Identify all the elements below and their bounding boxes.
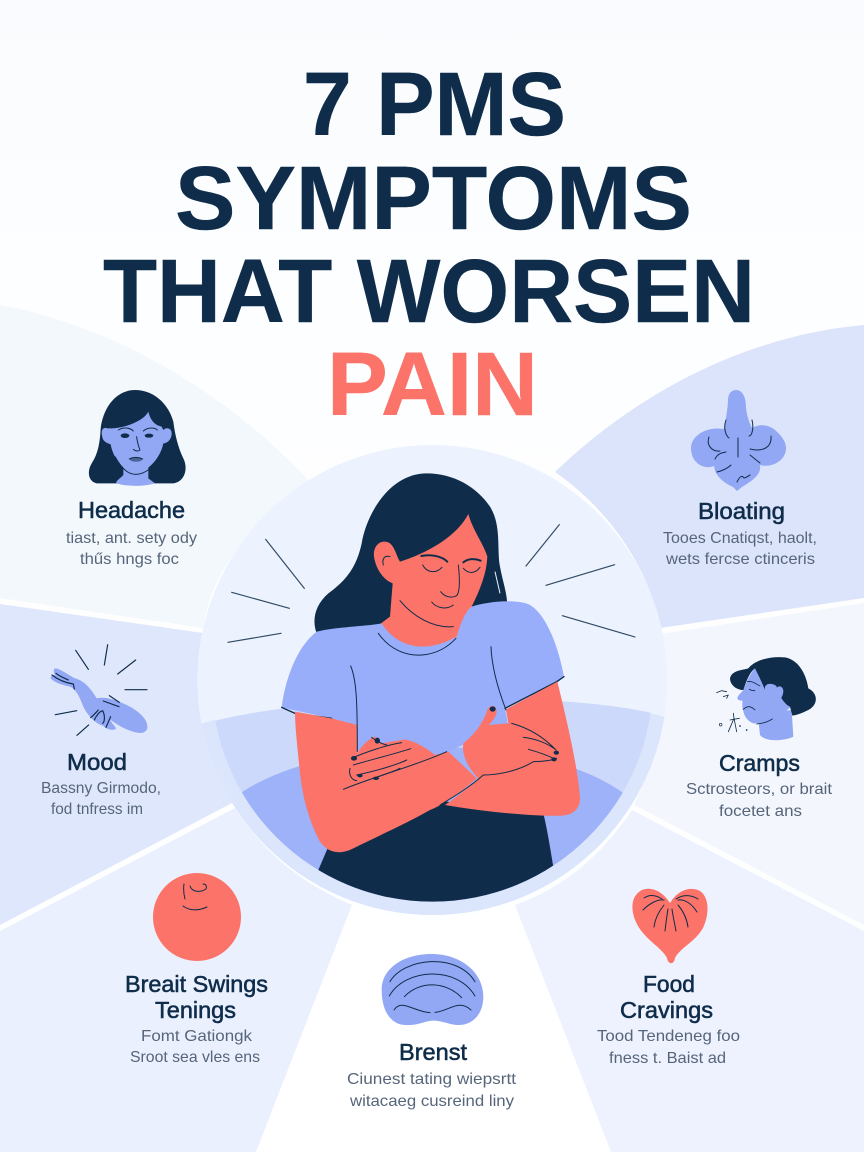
- symptom: cramps: [686, 657, 833, 820]
- panel: breast swings background: [0, 808, 352, 1152]
- description: fness t. Baist ad: [609, 1050, 726, 1067]
- symptom: mood: [41, 645, 161, 818]
- label: Brenst: [399, 1039, 468, 1065]
- right arm and hand: [445, 682, 580, 816]
- label: Food: [643, 971, 695, 997]
- description: [663, 530, 817, 568]
- symptom: food cravings: [597, 889, 740, 1067]
- panel: cramps background: [634, 603, 864, 925]
- hair: [314, 473, 507, 637]
- hair highlight: [495, 572, 500, 593]
- title: SYMPTOMS: [175, 149, 692, 249]
- label: [125, 971, 268, 1023]
- title: PAIN: [327, 335, 538, 435]
- label: Breait Swings: [125, 971, 268, 997]
- left arm: [295, 712, 477, 852]
- nails: [351, 706, 559, 780]
- description: [66, 530, 197, 568]
- icon: heart leaf: [632, 889, 708, 963]
- drawing details: face, arms, fingers: [343, 555, 557, 805]
- symptom: bloating: [663, 390, 817, 568]
- panel: bloating background: [555, 325, 864, 628]
- description: Bassny Girmodo,: [41, 780, 161, 797]
- description: Tooes Cnatiqst, haolt,: [663, 530, 817, 547]
- description: Tood Tendeneg foo: [597, 1028, 740, 1045]
- description: [41, 780, 161, 818]
- skirt: [318, 802, 554, 902]
- label: Mood: [67, 749, 127, 775]
- t-shirt: [282, 601, 564, 755]
- label: Bloating: [698, 498, 785, 524]
- icon: hand with pain lines: [51, 645, 147, 735]
- title: [103, 55, 755, 435]
- title: 7 PMS: [303, 55, 566, 155]
- label: Headache: [78, 497, 185, 523]
- pain rays: [228, 525, 635, 642]
- neck and face: [374, 514, 487, 650]
- description: witacaeg cusreind liny: [349, 1093, 514, 1110]
- symptom: breast: [347, 954, 517, 1110]
- description: wets fercse ctinceris: [665, 551, 815, 568]
- symptom: headache: [66, 390, 197, 568]
- icon: profile head: [717, 657, 816, 740]
- description: Fomt Gationgk: [141, 1028, 253, 1045]
- panel: breast background: [256, 905, 611, 1152]
- description: focetet ans: [719, 803, 802, 820]
- icon: red ball: [153, 873, 241, 961]
- panel: headache background: [0, 305, 310, 628]
- panel: mood background: [0, 604, 232, 925]
- sleeve hems: [282, 677, 564, 718]
- label: Tenings: [155, 997, 236, 1023]
- title: THAT WORSEN: [103, 242, 755, 342]
- panel: food cravings background: [515, 810, 864, 1152]
- label: [620, 971, 713, 1023]
- description: fod tnfress im: [51, 801, 143, 818]
- icon: head with headache: [89, 390, 186, 486]
- icon: bloated organ: [691, 390, 786, 491]
- background circle: [193, 445, 673, 923]
- symptom: breast swings tenings: [125, 873, 268, 1066]
- label: Cramps: [719, 750, 800, 776]
- description: Sctrosteors, or brait: [686, 781, 833, 798]
- description: [347, 1071, 517, 1110]
- description: thűs hngs foc: [80, 551, 179, 568]
- icon: blue rounded shape: [382, 954, 483, 1025]
- description: [686, 781, 833, 820]
- description: Ciunest tating wiepsrtt: [347, 1071, 517, 1088]
- description: tiast, ant. sety ody: [66, 530, 197, 547]
- label: Cravings: [620, 997, 713, 1023]
- description: Sroot sea vles ens: [130, 1049, 260, 1066]
- central illustration: woman in pain: [193, 445, 673, 923]
- description: [130, 1028, 260, 1066]
- description: [597, 1028, 740, 1067]
